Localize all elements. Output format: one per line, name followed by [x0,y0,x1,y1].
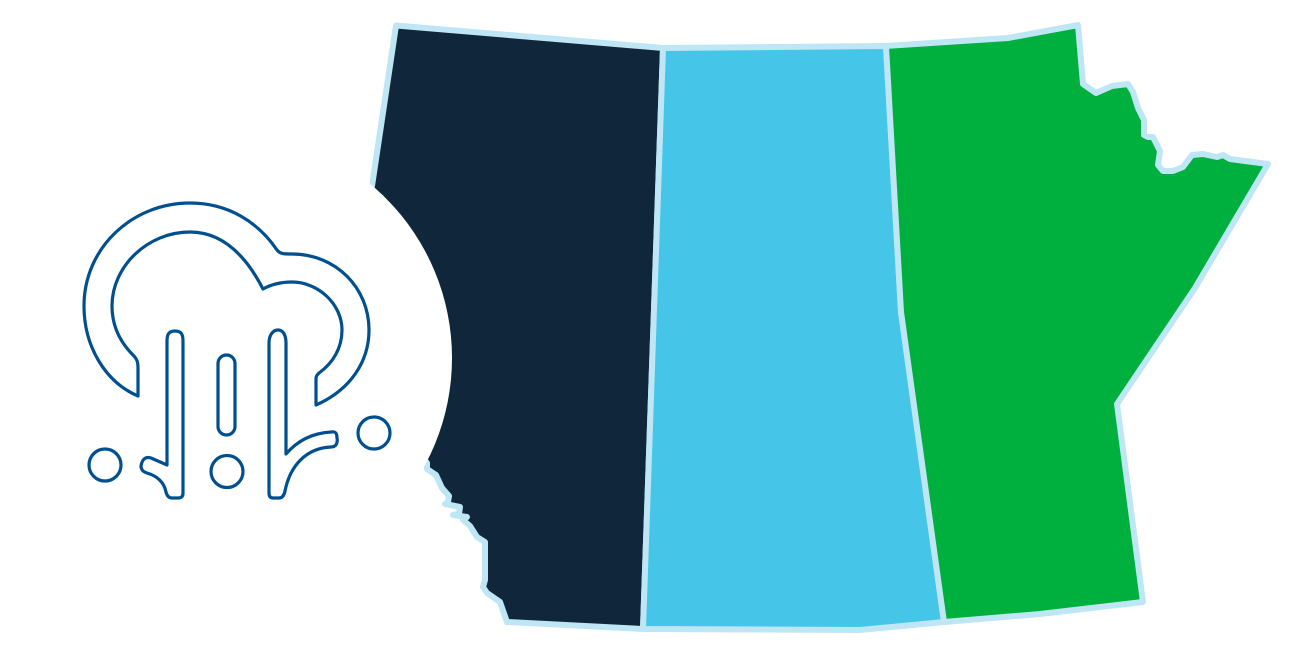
droplet left [89,449,121,481]
white circle cutout behind icon [0,132,452,584]
rain streak middle [218,355,235,435]
province: Saskatchewan [643,46,944,630]
province: Manitoba [886,25,1268,622]
droplet middle [211,456,243,488]
rain streak right [269,330,337,498]
province: Alberta [300,26,663,629]
rain streak left [141,331,183,498]
map of prairie provinces [300,25,1268,630]
droplet right [358,417,390,449]
icon: cloud with rain [84,203,390,498]
cloud outline [84,203,369,405]
